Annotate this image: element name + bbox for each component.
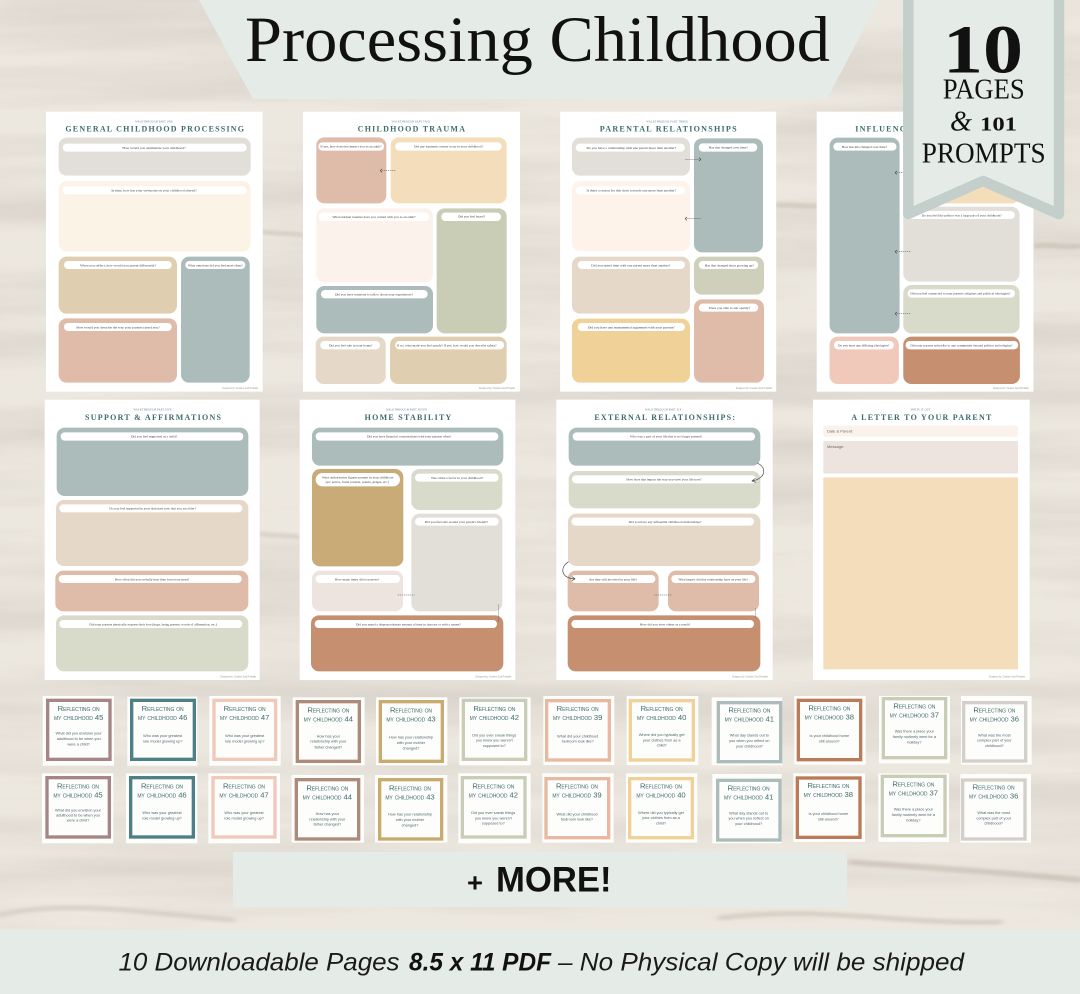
box: connected to ideologies: Did you feel connected to your parent's religious and political ideologies? (910, 292, 1011, 296)
box: changed over time (694, 138, 763, 252)
card 36 second row (960, 774, 1031, 843)
page: external relationships (556, 400, 773, 680)
box: residual traumas (316, 208, 433, 282)
card 44: relationship with your (310, 740, 347, 744)
page: childhood trauma (303, 112, 520, 392)
arrow: curved right side (752, 463, 764, 482)
field: message (823, 441, 1018, 474)
card 42: Did you ever sneak things (472, 733, 516, 737)
page footer credit: Designed by: Creative Soul Printable (479, 387, 516, 390)
prompt cards: left half (42, 696, 531, 843)
box: feel heard: Did you feel heard? (458, 215, 485, 219)
box: monumental arguments (572, 319, 690, 383)
card 37 second row: my childhood 37 (889, 788, 938, 797)
field: letter body (823, 477, 1018, 669)
card 38 second row (793, 773, 865, 842)
card 46 second row: role model growing up? (142, 816, 182, 820)
box: relationship impact (668, 571, 759, 611)
connector lines (398, 595, 499, 622)
card 37: Was there a place your (895, 730, 935, 734)
box: relationship with one parent (572, 138, 690, 176)
card 46: Who was your greatest (143, 734, 183, 738)
box: emotions felt (181, 257, 250, 383)
box: how parents raised you: How would you describe the way your parents raised you? (76, 325, 160, 329)
card 46 second row: Reflecting on (141, 782, 183, 791)
ribbon: 10 pages and 101 prompts: PAGES (943, 75, 1025, 106)
card 44: father changed? (314, 745, 342, 749)
card 37: family routinely went for a (893, 735, 937, 739)
page: a letter to your parent (813, 400, 1030, 680)
box: verbally hear love: How often did you verbally hear they loved you most? (115, 577, 190, 581)
page: support and affirmations: WALKTHROUGH PART FIVE (133, 409, 172, 412)
card 44 second row: Reflecting on (306, 783, 349, 792)
card 46 second row: my childhood 46 (137, 791, 187, 800)
page: home stability: WALKTHROUGH PART SEVEN (386, 409, 427, 412)
card 47 second row (208, 773, 280, 843)
card 39 second row: What did your childhood (556, 812, 598, 816)
card 40 second row: Reflecting on (640, 782, 682, 791)
card 41 second row: your childhood? (735, 822, 762, 826)
card 43: my childhood 43 (386, 715, 436, 724)
card 36 second row: What was the most (977, 811, 1011, 815)
box: summarize childhood (59, 138, 251, 176)
card 38: Is your childhood home (810, 734, 849, 738)
page: influences (817, 112, 1033, 392)
arrow: pointing left (685, 217, 701, 220)
arrows: pointing left (895, 171, 910, 315)
page: general childhood processing: WALKTHROUGH PART ONE (135, 120, 173, 123)
box: financial conversations: Did you have financial conversations with your parents often? (367, 435, 452, 439)
box: spend time with one parent: Did you spend time with one parent more than another? (591, 263, 671, 267)
card 45: my childhood 45 (54, 713, 103, 722)
box: viewpoint altered (59, 181, 251, 252)
box: describe safety: If no, what made you feel unsafe? If yes, how would you describe safety? (397, 343, 497, 348)
card 41: What day stands out to (730, 734, 769, 738)
title banner (199, 0, 879, 99)
card 44 second row: my childhood 44 (303, 792, 353, 801)
page footer credit: Designed by: Creative Soul Printable (222, 387, 259, 390)
box: spend time with one parent (572, 257, 690, 314)
card 45 second row: were a child? (67, 819, 89, 823)
box: traumatic events: Did any traumatic events occur in your childhood? (414, 145, 483, 149)
box: safe around friends (411, 514, 502, 611)
footer strip: download note: – No Physical Copy will be shipped (557, 949, 965, 977)
box: politics in childhood (903, 207, 1020, 282)
card 40 second row: Where did you typically get (638, 811, 685, 815)
card 42 second row: Reflecting on (472, 782, 515, 791)
page: support and affirmations (45, 400, 260, 680)
card 43: with your mother (397, 741, 426, 745)
box: daycare or nanny (311, 615, 503, 671)
card 40 second row: my childhood 40 (636, 791, 686, 800)
box: impact view of life: How does that impact the way you view your life now? (626, 478, 702, 482)
box: changed over time: Has that changed over time? (709, 146, 748, 150)
card 47 second row: Reflecting on (223, 782, 265, 791)
page footer credit: Designed by: Creative Soul Printable (220, 675, 257, 678)
card 41 second row: my childhood 41 (724, 793, 773, 802)
box: summarize childhood: How would you summarize your childhood? (122, 146, 186, 150)
ribbon: 10 pages and 101 prompts: & (950, 107, 972, 138)
card 39 second row (542, 773, 614, 843)
box: safe at home: Did you feel safe in your home? (329, 343, 373, 347)
card 46 second row: Who was your greatest (142, 811, 183, 815)
card 44 second row (292, 775, 364, 843)
card 39 second row: my childhood 39 (552, 791, 602, 800)
ribbon: 10 pages and 101 prompts: 10 (943, 12, 1023, 88)
card 39 second row: Reflecting on (556, 782, 598, 791)
box: differing ideologies (830, 337, 899, 384)
box: ask openly (694, 299, 764, 383)
card 39 second row: bedroom look like? (561, 818, 593, 822)
card 41 second row: Reflecting on (728, 784, 770, 793)
card 37: Reflecting on (893, 702, 936, 711)
card 37: holiday? (907, 740, 921, 744)
card 47 (209, 696, 281, 766)
box: community beyond politics (903, 337, 1020, 384)
page: influences: INFLUENCES & IDEOLOGIES (855, 125, 996, 134)
card 37 second row (878, 773, 949, 842)
card 36: my childhood 36 (970, 714, 1019, 723)
box: verbally hear love (55, 571, 248, 611)
more banner (233, 852, 847, 907)
card 40 second row (626, 773, 697, 843)
box: emotions felt: What emotions did you feel most often? (188, 263, 243, 267)
card 41: you when you reflect on (729, 739, 770, 743)
card 40: your clothes from as a (643, 738, 681, 742)
box: reason for this draw (572, 181, 690, 251)
card 38: my childhood 38 (805, 712, 854, 721)
box: ask openly: Were you able to ask openly? (709, 306, 751, 310)
page: parental relationships (560, 112, 776, 392)
box: someone to talk to (316, 286, 433, 333)
card 41: my childhood 41 (725, 715, 774, 724)
page footer credit: Designed by: Creative Soul Printable (736, 387, 773, 390)
card 43 (376, 697, 447, 765)
page: a letter to your parent: WRITE IT OUT (911, 409, 931, 412)
page: a letter to your parent: A LETTER TO YOUR PARENT (851, 413, 992, 422)
box: community beyond politics: Did your parents subscribe to any community beyond politics and religion? (910, 343, 1013, 347)
page footer credit: Designed by: Creative Soul Printable (993, 387, 1029, 390)
box: relationship impact: What impact did that relationship have on your life? (678, 577, 748, 581)
box: no longer present (569, 428, 760, 466)
card 45 second row: adulthood to be when you (56, 813, 100, 817)
box: financial conversations (312, 428, 503, 466)
card 45 second row: Reflecting on (57, 782, 99, 791)
page: external relationships: EXTERNAL RELATIONSHIPS: (594, 413, 735, 422)
card 42: you knew you weren't (476, 739, 514, 743)
card 41 second row: What day stands out to (729, 811, 768, 815)
footer strip: download note: 8.5 x 11 PDF (409, 949, 552, 977)
card 42 second row: my childhood 42 (469, 791, 518, 800)
card 42 second row: you knew you weren't (475, 816, 513, 820)
card 38 second row: Reflecting on (807, 781, 850, 790)
card 37 second row: Was there a place your (894, 808, 934, 812)
box: parent differently (59, 257, 177, 314)
card 40: my childhood 40 (637, 713, 686, 722)
box: still involved: Are they still involved in your life? (589, 577, 637, 581)
ribbon: 10 pages and 101 prompts: 101 (980, 114, 1017, 136)
box: physically express love (56, 615, 248, 671)
box: changed since growing up: Has that changed since growing up? (705, 263, 754, 267)
box: no longer present: Who was a part of your life that is no longer present? (630, 435, 703, 439)
box: crime a factor: Was crime a factor in your childhood? (431, 476, 483, 480)
card 41: Reflecting on (728, 706, 771, 715)
footer strip: download note (0, 930, 1080, 994)
box: reason for this draw: Is there a reason for this draw towards one more than another? (587, 189, 677, 193)
card 44 second row: father changed? (313, 823, 341, 827)
connector lines (654, 595, 756, 618)
card 45 second row: my childhood 45 (53, 791, 103, 800)
card 37 (879, 696, 950, 763)
card 39: my childhood 39 (553, 713, 602, 722)
box: changed over time: How has this changed over time? (842, 145, 887, 149)
card 45: What did you envision your (56, 732, 102, 736)
card 42 second row: supposed to? (482, 822, 505, 826)
card 42: supposed to? (483, 744, 506, 748)
card 38: still around? (819, 739, 840, 743)
box: view others as a result (568, 615, 760, 671)
box: feel heard (437, 208, 507, 333)
card 42 (459, 697, 531, 765)
card 39 (543, 696, 614, 765)
box: traumatic events (391, 137, 507, 203)
card 45: adulthood to be when you (57, 737, 101, 741)
box: impact as an adult: If yes, how does that impact you as an adult? (320, 145, 382, 150)
box: politics in childhood: Do you feel like politics was a large part of your childhood? (922, 213, 1002, 217)
card 41 second row: you when you reflect on (728, 817, 769, 821)
card 47: Who was your greatest (225, 734, 265, 738)
card 43 second row: Reflecting on (389, 783, 431, 792)
card 36: Reflecting on (973, 705, 1016, 714)
card 43 second row (375, 775, 447, 843)
card 43 second row: with your mother (396, 818, 425, 822)
box: relationship with one parent: Do you have a relationship with one parent more than another? (587, 146, 677, 150)
box: describe safety (390, 337, 507, 384)
card 40: Reflecting on (641, 704, 683, 713)
box: times moved: How many times did you move? (335, 577, 380, 581)
card 42 second row: Did you ever sneak things (471, 811, 515, 815)
card 44: How has your (317, 734, 341, 738)
arrow: curved left side (563, 562, 575, 581)
box: monumental arguments: Did you have any monumental arguments with your parents? (588, 325, 675, 329)
box: authoritative figures (312, 469, 403, 566)
box: authoritative figures: Were authoritative figures present in your childhood (322, 476, 394, 480)
box: viewpoint altered: In time, how has your viewpoint on your childhood altered? (111, 189, 197, 194)
arrow: pointing right (685, 158, 701, 161)
card 45: Reflecting on (58, 704, 100, 713)
box: residual traumas: What residual traumas have you carried with you as an adult? (332, 215, 416, 219)
box: connected to ideologies (903, 285, 1020, 333)
page footer credit: Designed by: Creative Soul Printable (989, 675, 1026, 678)
box: impact view of life (569, 471, 760, 508)
card 45: were a child? (67, 742, 90, 746)
page: external relationships: WALKTHROUGH PART SIX (645, 409, 682, 412)
box: supported in decisions: Do you feel supported in your decisions now that you are older? (109, 507, 196, 511)
box: authoritative figures: (ex: police, foster parents, priests, judges, etc.) (326, 480, 389, 485)
card 36 second row: Reflecting on (973, 783, 1015, 792)
page: childhood trauma: WALKTHROUGH PART TWO (391, 120, 430, 123)
card 43 second row: my childhood 43 (385, 792, 435, 801)
card 40 (627, 696, 698, 765)
box: daycare or nanny: Did you spend a disproportionate amount of time in daycare or with a nanny? (356, 622, 461, 626)
page: parental relationships: WALKTHROUGH PART THREE (646, 120, 688, 123)
card 36: childhood? (985, 744, 1004, 748)
card 43: How has your relationship (389, 736, 433, 740)
ribbon: 10 pages and 101 prompts (908, 0, 1059, 214)
card 44: Reflecting on (307, 706, 350, 715)
card 46: Reflecting on (142, 704, 184, 713)
card 37: my childhood 37 (890, 711, 939, 720)
page footer credit: Designed by: Creative Soul Printable (475, 675, 512, 678)
box: supported in decisions (56, 500, 248, 566)
card 40: child? (657, 744, 667, 748)
card 36 second row: complex part of your (976, 816, 1012, 820)
box: influential relationships (568, 514, 760, 566)
page: general childhood processing: GENERAL CHILDHOOD PROCESSING (65, 125, 244, 134)
card 36 second row: childhood? (984, 822, 1003, 826)
more banner: MORE! (496, 861, 612, 900)
card 40 second row: child? (656, 821, 666, 825)
card 39: bedroom look like? (562, 740, 594, 744)
page: general childhood processing (46, 112, 263, 392)
card 47: Reflecting on (224, 704, 266, 713)
card 41: your childhood? (736, 744, 763, 748)
page: support and affirmations: SUPPORT & AFFIRMATIONS (85, 413, 222, 422)
box: someone to talk to: Did you have someone to talk to about your experiences? (335, 292, 413, 296)
card 42 second row (458, 773, 531, 843)
card 47: my childhood 47 (220, 713, 269, 722)
page: home stability (300, 400, 515, 680)
card 42: my childhood 42 (470, 713, 519, 722)
card 40 second row: your clothes from as a (642, 816, 681, 820)
card 44 second row: How has your (316, 812, 340, 816)
card 45 second row (42, 773, 113, 843)
field: date and parent: Date & Parent: (827, 428, 853, 433)
box: how parents raised you (59, 318, 177, 383)
box: safe at home (316, 337, 386, 384)
card 39: What did your childhood (557, 734, 598, 738)
card 43: changed? (403, 746, 419, 750)
card 45 second row: What did you envision your (55, 808, 102, 812)
card 46 (127, 697, 197, 766)
card 46 second row (126, 773, 197, 843)
box: view others as a result: How did you view others as a result? (640, 622, 691, 626)
box: supported as a child: Did you feel supported as a child? (131, 435, 178, 439)
card 39: Reflecting on (557, 704, 599, 713)
card 43 second row: changed? (402, 823, 418, 827)
card 37 second row: Reflecting on (892, 780, 935, 789)
box: crime a factor (411, 469, 502, 510)
card 40: Where did you typically get (639, 733, 685, 737)
field: message: Message: (827, 444, 844, 449)
footer strip: download note: 10 Downloadable Pages (118, 949, 400, 977)
more banner: + (467, 868, 483, 898)
card 43: Reflecting on (390, 706, 432, 715)
card 37 second row: family routinely went for a (892, 813, 936, 817)
box: differing ideologies: Do you have any differing ideologies? (838, 343, 890, 347)
card 42: Reflecting on (473, 704, 516, 713)
card 36 second row: my childhood 36 (969, 792, 1018, 801)
prompt cards: right half (542, 696, 1032, 843)
page: childhood trauma: CHILDHOOD TRAUMA (358, 125, 465, 134)
page footer credit: Designed by: Creative Soul Printable (732, 675, 769, 678)
card 38 (794, 696, 866, 765)
card 44 second row: relationship with your (309, 817, 346, 821)
card 36 (961, 696, 1032, 765)
card 36: complex part of your (977, 739, 1012, 743)
box: parent differently: When you reflect, how would you parent differently? (80, 263, 156, 268)
ribbon: 10 pages and 101 prompts: PROMPTS (922, 139, 1046, 170)
box: hidden peach panel (903, 138, 1020, 203)
card 43 second row: How has your relationship (388, 813, 432, 817)
card 38 second row: my childhood 38 (804, 790, 853, 799)
card 44: my childhood 44 (304, 715, 354, 724)
card 41 second row (712, 774, 782, 843)
card 37 second row: holiday? (906, 818, 920, 822)
card 47 second row: Who was your greatest (224, 811, 265, 815)
box: influential relationships: Did you have any influential childhood relationships? (629, 520, 702, 524)
box: changed since growing up (694, 257, 764, 295)
box: still involved (568, 571, 659, 611)
card 36: What was the most (978, 733, 1012, 737)
card 47 second row: my childhood 47 (219, 791, 269, 800)
page: influences: WALKTHROUGH PART FOUR (905, 120, 945, 123)
card 38 second row: still around? (818, 817, 839, 821)
card 47: role model growing up? (225, 739, 265, 743)
box: supported as a child (57, 428, 248, 496)
card 41 (712, 697, 782, 765)
page: parental relationships: PARENTAL RELATIONSHIPS (600, 125, 737, 134)
arrow: pointing left (380, 169, 395, 172)
card 46: role model growing up? (143, 739, 183, 743)
card 38: Reflecting on (808, 703, 851, 712)
card 46: my childhood 46 (138, 713, 187, 722)
card 44 (293, 697, 365, 765)
page: home stability: HOME STABILITY (365, 413, 452, 422)
box: times moved (312, 571, 403, 611)
card 47 second row: role model growing up? (224, 816, 264, 820)
box: physically express love: Did your parents physically express their love (hugs, being present, words of affirmation, etc.) (89, 622, 217, 627)
box: impact as an adult (316, 137, 386, 203)
title text: Processing Childhood (245, 4, 830, 76)
field: date and parent (823, 426, 1018, 437)
box: safe around friends: Did you feel safe around your parent's friends? (425, 520, 488, 524)
card 38 second row: Is your childhood home (809, 812, 848, 816)
card 45 (43, 696, 114, 766)
box: changed over time (830, 138, 900, 333)
